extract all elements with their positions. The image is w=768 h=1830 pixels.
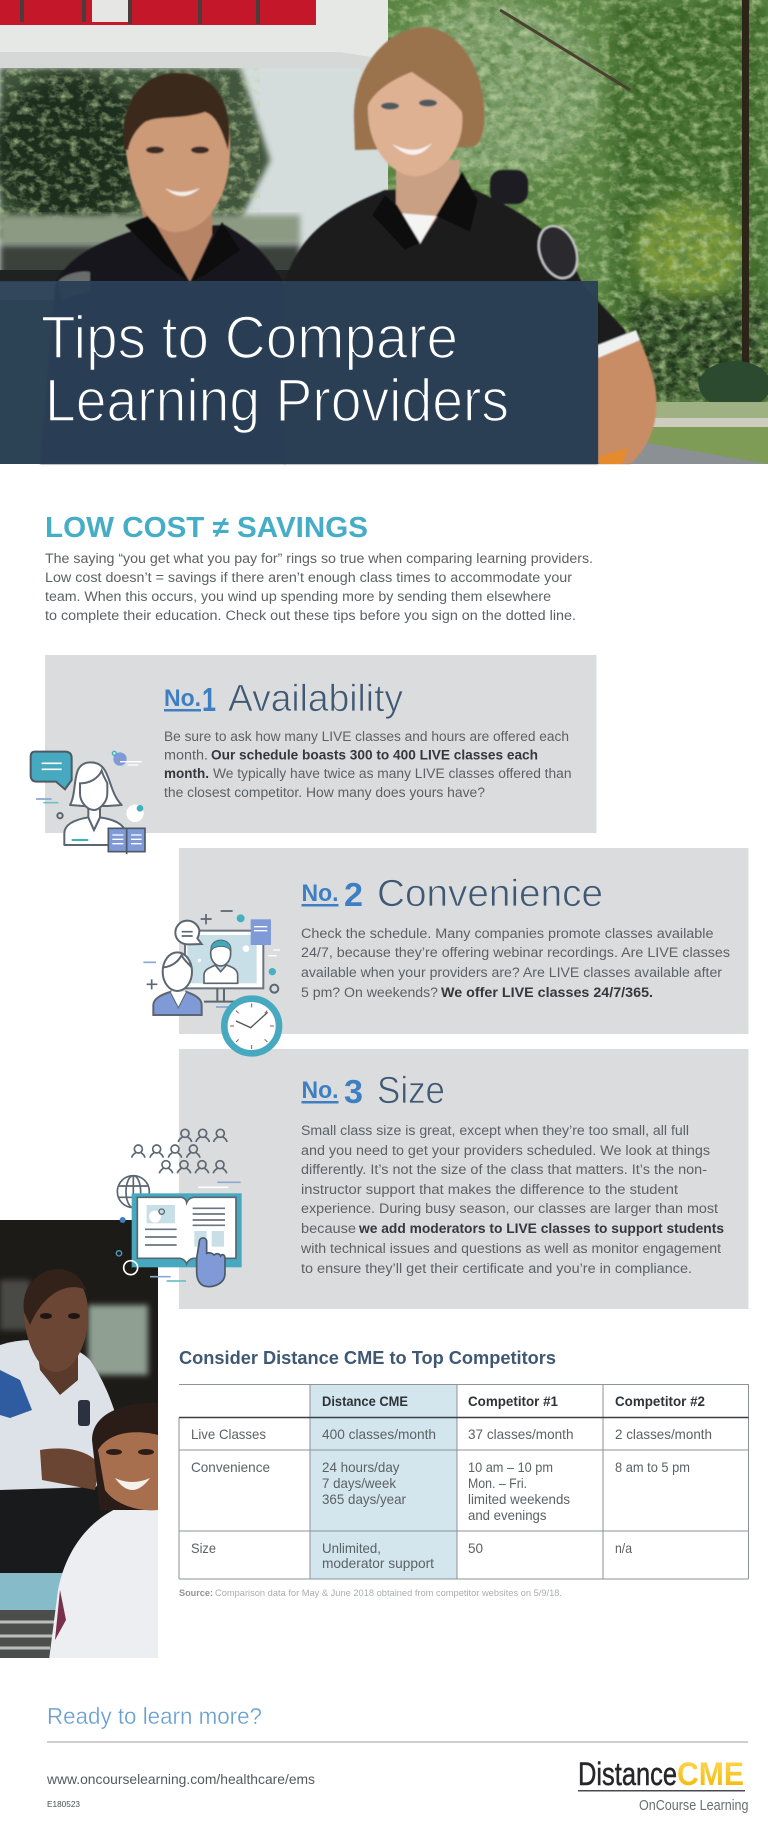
trees background: [380, 0, 768, 464]
heading: size: Size: [377, 1070, 445, 1112]
number 3: [302, 1073, 363, 1110]
panel: convenience: [179, 848, 748, 1034]
row: size: Size: [191, 1541, 216, 1556]
call to action: Ready to learn more?: [47, 1703, 262, 1729]
row: size: [191, 1541, 632, 1571]
row: convenience: limited weekends: [468, 1492, 570, 1507]
row: convenience: [191, 1460, 690, 1523]
size text: with technical issues and questions as well as monitor engagement: [300, 1241, 721, 1257]
size text: because: [301, 1221, 356, 1237]
row: size: n/a: [615, 1541, 632, 1556]
availability text: the closest competitor. How many does yours have?: [164, 785, 485, 801]
man: [40, 73, 285, 464]
number 3: 3: [344, 1073, 363, 1110]
icon: open book with class of students: [116, 1129, 242, 1287]
row: convenience: Convenience: [191, 1460, 270, 1475]
size text: Small class size is great, except when they’re too small, all full: [301, 1123, 689, 1139]
convenience text: 24/7, because they’re offering webinar recordings. Are LIVE classes: [301, 945, 730, 961]
size text: experience. During busy season, our classes are larger than most: [301, 1201, 718, 1217]
number 2: [302, 876, 363, 913]
availability text: Our schedule boasts 300 to 400 LIVE classes each: [211, 748, 538, 764]
row: live classes: 2 classes/month: [615, 1427, 712, 1442]
logo: Distance CME / OnCourse Learning: CME: [677, 1756, 744, 1792]
icon: woman with speech bubble and book: [31, 751, 145, 854]
availability text: [164, 729, 572, 801]
intro text: team. When this occurs, you wind up spending more by sending them elsewhere: [45, 589, 551, 605]
row: convenience: 7 days/week: [322, 1476, 396, 1491]
row: convenience: and evenings: [468, 1508, 547, 1523]
row: convenience: Mon. – Fri.: [468, 1476, 527, 1491]
number 2: No.: [302, 880, 338, 907]
availability text: month.: [164, 766, 209, 782]
intro text: Low cost doesn’t = savings if there aren’t enough class times to accommodate your: [45, 570, 572, 586]
size text: [300, 1123, 724, 1277]
number 3: No.: [302, 1077, 338, 1104]
number 1: No.: [164, 685, 201, 712]
convenience text: Check the schedule. Many companies promote classes available: [301, 926, 714, 942]
heading: convenience: Convenience: [377, 873, 603, 915]
convenience text: 5 pm? On weekends?: [301, 985, 438, 1001]
convenience text: available when your providers are? Are LIVE classes available after: [301, 965, 722, 981]
table header: Competitor #1: [468, 1394, 558, 1409]
comparison table: [179, 1384, 748, 1579]
intro text: The saying “you get what you pay for” rings so true when comparing learning providers.: [45, 551, 593, 567]
row: convenience: 8 am to 5 pm: [615, 1460, 690, 1475]
source note: Source:: [179, 1588, 213, 1599]
icon: webinar monitor and clock: [143, 911, 280, 1053]
table header: Competitor #2: [615, 1394, 705, 1409]
table header: [322, 1394, 705, 1409]
title: [41, 304, 509, 434]
heading: low cost: LOW COST ≠ SAVINGS: [45, 512, 368, 544]
document code: E180523: [47, 1800, 81, 1809]
logo: Distance CME / OnCourse Learning: Distance: [578, 1756, 677, 1792]
title: Learning Providers: [45, 367, 509, 434]
size text: to ensure they’ll get their certificate and you’re in compliance.: [301, 1261, 692, 1277]
row: live classes: 37 classes/month: [468, 1427, 574, 1442]
panel: availability: [45, 655, 596, 833]
photo: two paramedics in ambulance: [0, 1220, 158, 1660]
size text: differently. It’s not the size of the class that matters. It’s the non-: [301, 1162, 707, 1178]
availability text: We typically have twice as many LIVE classes offered than: [213, 766, 572, 782]
woman: [284, 27, 657, 464]
title: Tips to Compare: [41, 304, 458, 371]
size text: and you need to get your providers scheduled. We look at things: [301, 1143, 710, 1159]
row: size: Unlimited,: [322, 1541, 381, 1556]
convenience text: We offer LIVE classes 24/7/365.: [441, 985, 653, 1001]
hero photo: paramedics in front of ambulance: [0, 0, 768, 464]
convenience text: [301, 926, 730, 1001]
number 1: 1: [202, 681, 216, 718]
intro text: [45, 551, 593, 624]
row: live classes: Live Classes: [191, 1427, 266, 1442]
row: convenience: 365 days/year: [322, 1492, 406, 1507]
availability text: Be sure to ask how many LIVE classes and hours are offered each: [164, 729, 569, 745]
heading: availability: Availability: [228, 678, 403, 720]
number 1: [164, 681, 216, 718]
logo: Distance CME / OnCourse Learning: [578, 1756, 748, 1814]
row: live classes: 400 classes/month: [322, 1427, 436, 1442]
row: size: moderator support: [322, 1556, 434, 1571]
intro text: to complete their education. Check out these tips before you sign on the dotted line.: [45, 608, 576, 624]
availability text: month.: [164, 748, 208, 764]
students: [132, 1129, 227, 1173]
row: size: 50: [468, 1541, 483, 1556]
size text: instructor support that makes the difference to the student: [301, 1182, 678, 1198]
heading: comparison table: Consider Distance CME to Top Competitors: [179, 1348, 556, 1368]
panel: size: [179, 1049, 748, 1309]
row: convenience: 10 am – 10 pm: [468, 1460, 553, 1475]
source note: Comparison data for May & June 2018 obtained from competitor websites on 5/9/18.: [215, 1588, 562, 1599]
title banner: [0, 281, 598, 464]
website url: www.oncourselearning.com/healthcare/ems: [46, 1771, 315, 1787]
logo: Distance CME / OnCourse Learning: OnCourse Learning: [639, 1797, 748, 1814]
number 2: 2: [344, 876, 363, 913]
globe: [117, 1176, 149, 1208]
ambulance: [0, 0, 388, 300]
size text: we add moderators to LIVE classes to support students: [358, 1221, 724, 1237]
row: live classes: [191, 1427, 712, 1442]
table header: Distance CME: [322, 1394, 408, 1409]
row: convenience: 24 hours/day: [322, 1460, 400, 1475]
